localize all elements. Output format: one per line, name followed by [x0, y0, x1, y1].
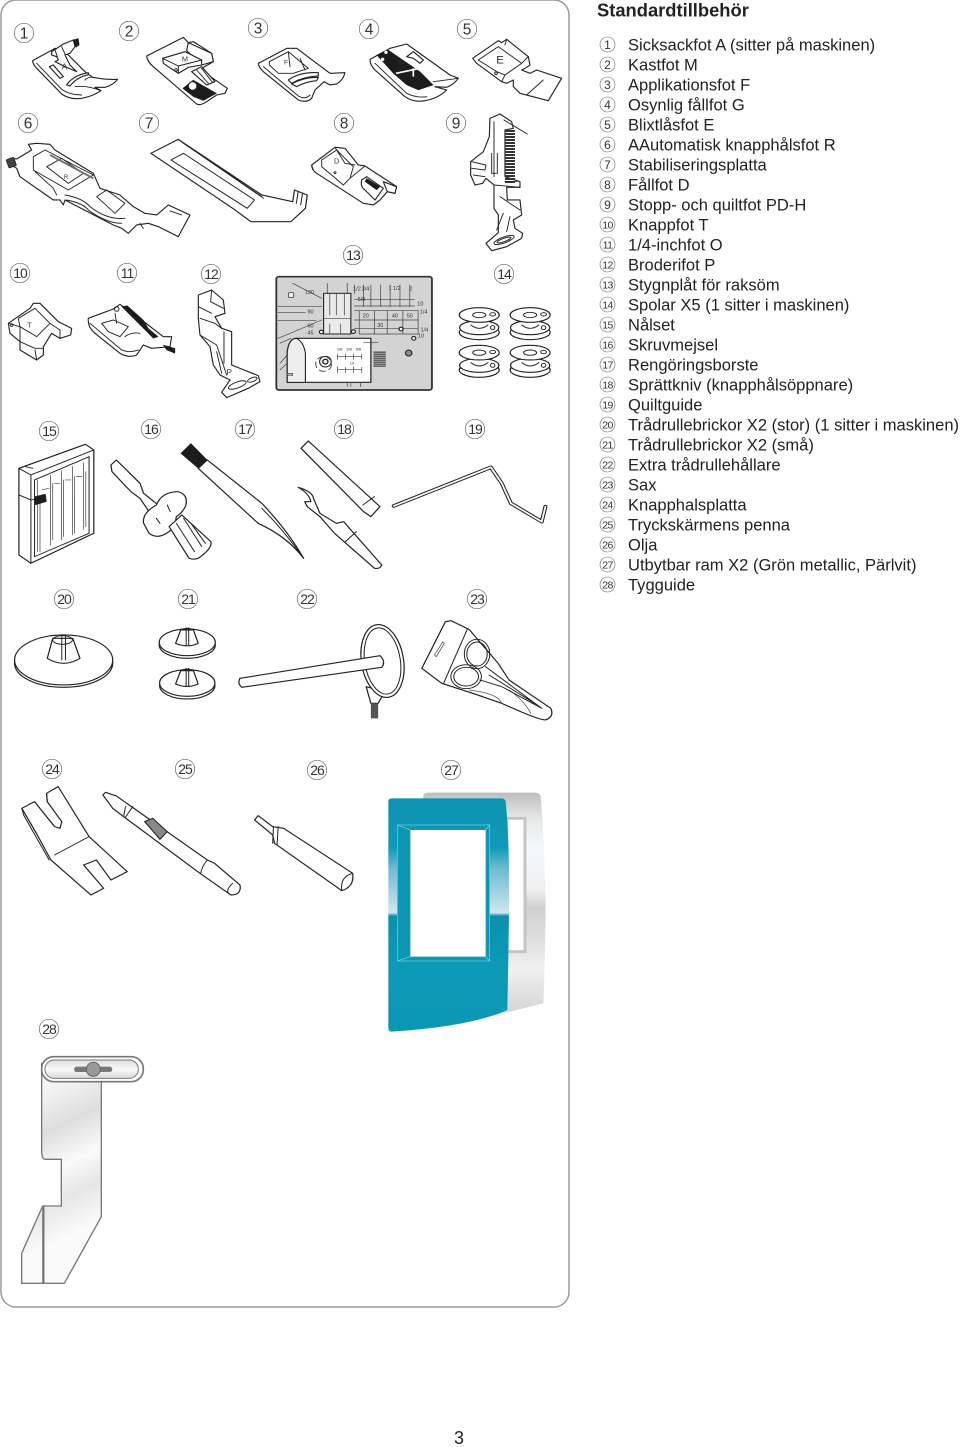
list item 17: 17 [602, 360, 613, 372]
icon: interchangeable frames [388, 793, 546, 1032]
icon: touch screen stylus [103, 792, 240, 895]
icon: straight stitch plate: 20 [363, 314, 369, 319]
label 3 [248, 18, 268, 38]
list item 3: Applikationsfot F [628, 76, 750, 94]
list item 13: 13 [602, 280, 613, 292]
list item 28: 28 [602, 580, 613, 592]
label 26 [307, 760, 327, 780]
list item 23: Sax [628, 476, 657, 494]
label 7: 7 [145, 116, 153, 132]
list: accessories [600, 36, 959, 594]
list item 23 [600, 476, 657, 494]
list item 12: 12 [602, 260, 613, 272]
list item 26: Olja [628, 536, 658, 554]
label 1: 1 [20, 26, 28, 42]
label 6: 6 [24, 116, 32, 132]
label 20: 20 [57, 591, 72, 607]
label 23 [467, 589, 487, 609]
icon: automatic buttonhole foot R [6, 143, 190, 237]
icon: button shank plate [22, 787, 127, 895]
icon: straight stitch plate: 10 [418, 334, 424, 339]
label 4 [359, 19, 379, 39]
list item 11: 11 [603, 240, 613, 252]
label 2 [119, 21, 139, 41]
list item 18: Sprättkniv (knapphålsöppnare) [628, 376, 853, 394]
label 14 [494, 264, 514, 284]
icon: applique foot F: F [284, 60, 288, 67]
list item 18: 18 [602, 380, 613, 392]
list item 14: Spolar X5 (1 sitter i maskinen) [628, 296, 849, 314]
icon: quarter inch foot O [88, 304, 175, 356]
label 17: 17 [238, 421, 253, 437]
label 9: 9 [452, 116, 460, 132]
icon: straight stitch plate: 2 [409, 287, 412, 293]
label 13 [343, 245, 363, 265]
icon: scissors [422, 621, 552, 720]
icon: blind hem foot G [370, 44, 458, 101]
icon: straight stitch plate: 10 [350, 361, 354, 365]
list item 19: 19 [602, 400, 613, 412]
icon: small spool cap 2 [160, 668, 215, 699]
icon: straight stitch plate: 120 [305, 290, 314, 296]
list item 21: 21 [602, 440, 613, 452]
list item 25: Tryckskärmens penna [628, 516, 791, 534]
icon: screwdriver [111, 460, 211, 559]
list item 15 [600, 316, 675, 334]
list item 3: 3 [604, 78, 611, 92]
list item 26: 26 [602, 540, 613, 552]
icon: straight stitch plate [276, 277, 432, 390]
list item 6: AAutomatisk knapphålsfot R [628, 136, 836, 154]
label 25: 25 [178, 761, 193, 777]
icon: straight stitch plate: 30 [377, 323, 383, 329]
list item 22: 22 [602, 460, 613, 472]
icon: button foot T [8, 303, 72, 360]
icon: straight stitch plate: 5/8 [356, 348, 361, 352]
label 7 [139, 113, 159, 133]
icon: bobbin 1 [459, 308, 499, 340]
icon: fabric guide [22, 1057, 143, 1283]
icon: straight stitch plate: 45 [307, 331, 314, 337]
list item 16: 16 [602, 340, 613, 352]
label 26: 26 [310, 762, 325, 778]
icon: straight stitch plate: 1/2 [353, 287, 361, 293]
label 3: 3 [254, 20, 262, 38]
label 19 [465, 419, 485, 439]
icon: large spool cap [15, 635, 113, 687]
list item 1: 1 [604, 38, 611, 52]
label 1 [14, 23, 34, 43]
icon: zigzag foot A: A [61, 61, 67, 71]
list item 10: Knappfot T [628, 216, 709, 234]
label 17 [235, 419, 255, 439]
label 23: 23 [470, 591, 485, 607]
list item 23: 23 [602, 480, 613, 492]
illustrations row 3 and 4 [19, 277, 550, 568]
label 21 [178, 589, 198, 609]
list item 1: Sicksackfot A (sitter på maskinen) [628, 36, 875, 54]
icon: straight stitch plate: 60 [307, 324, 314, 330]
list item 4: Osynlig fållfot G [628, 96, 745, 114]
label 27: 27 [444, 762, 459, 778]
label 28: 28 [42, 1021, 57, 1037]
icon: cleaning brush [181, 443, 304, 558]
label 4: 4 [365, 22, 374, 38]
list item 13: Stygnplåt för raksöm [628, 276, 780, 294]
label 18 [334, 419, 354, 439]
icon: zipper foot E [473, 39, 562, 101]
label 24: 24 [45, 761, 60, 777]
list item 4: 4 [604, 98, 611, 112]
icon: straight stitch plate: 1/4 [421, 328, 428, 334]
icon: overcast foot M: M [182, 55, 188, 64]
label 18: 18 [337, 421, 352, 437]
icon: quilting foot PD-H [471, 114, 527, 251]
list item 5: 5 [604, 118, 611, 132]
label 21: 21 [181, 591, 196, 607]
icon: quilting guide [394, 467, 545, 522]
list item 24: 24 [602, 500, 613, 512]
list item 8: 8 [604, 178, 611, 192]
list item 10: 10 [602, 220, 613, 232]
list item 2: 2 [604, 58, 611, 72]
list item 7: 7 [604, 158, 611, 172]
icon: straight stitch plate: 1/4 [420, 310, 427, 315]
label 25 [175, 759, 195, 779]
list item 9: Stopp- och quiltfot PD-H [628, 196, 806, 214]
icon: needle set [19, 444, 94, 563]
label 24 [42, 759, 62, 779]
icon: embroidery foot P: P [227, 368, 232, 377]
list item 20: Trådrullebrickor X2 (stor) (1 sitter i maskinen) [628, 416, 959, 434]
icon: extra spool holder [239, 622, 409, 718]
label 20 [54, 589, 74, 609]
icon: zipper foot E: E [496, 54, 504, 66]
list item 19: Quiltguide [628, 396, 702, 414]
icon: automatic buttonhole foot R: R [64, 175, 69, 181]
icon: straight stitch plate: 90 [307, 310, 314, 315]
icon: small spool cap 1 [159, 628, 215, 658]
list item 12: Broderifot P [628, 256, 715, 274]
list item 15: 15 [602, 320, 613, 332]
label 22: 22 [300, 591, 315, 607]
icon: straight stitch plate: 40 [392, 314, 398, 319]
icon: applique foot F [258, 48, 345, 101]
list item 24: Knapphalsplatta [628, 496, 747, 514]
heading: Standardtillbehör [597, 0, 749, 20]
list item 8: Fållfot D [628, 176, 690, 194]
icon: overcast foot M [147, 37, 227, 105]
list item 16: Skruvmejsel [628, 336, 718, 354]
icon: button foot T: T [27, 321, 32, 330]
list item 6: 6 [604, 138, 611, 152]
icon: zigzag foot A [33, 38, 118, 99]
label 9 [446, 113, 466, 133]
list item 21: Trådrullebrickor X2 (små) [628, 436, 814, 454]
label 11: 11 [121, 265, 134, 281]
label 13: 13 [346, 247, 361, 263]
icon: straight stitch plate: 50 [407, 314, 413, 319]
panel: accessories illustration [1, 0, 569, 1307]
list item 27: Utbytbar ram X2 (Grön metallic, Pärlvit) [628, 556, 916, 574]
icon: stabilizer plate [151, 139, 307, 222]
icon: hemmer foot D: D [334, 156, 339, 165]
list item 25: 25 [602, 520, 613, 532]
label 5 [457, 19, 477, 39]
label 10: 10 [13, 265, 28, 281]
icon: straight stitch plate: 5/8 [358, 297, 365, 303]
icon: oil bottle [255, 816, 353, 891]
list item 8 [600, 176, 690, 194]
icon: bobbin 4 [510, 345, 550, 377]
list item 22: Extra trådrullehållare [628, 456, 781, 474]
list item 11: 1/4-inchfot O [628, 236, 723, 254]
list item 28: Tygguide [628, 576, 695, 594]
label 12 [201, 264, 221, 284]
label 22 [297, 589, 317, 609]
icon: embroidery foot P [198, 290, 260, 398]
label 2: 2 [125, 24, 133, 40]
icon: straight stitch plate: 1 1/2 [388, 286, 401, 292]
label 28 [39, 1019, 59, 1039]
label 27 [441, 760, 461, 780]
icon: straight stitch plate: 10 [417, 302, 423, 308]
label 10 [10, 263, 30, 283]
list item 14: 14 [602, 300, 613, 312]
label 11 [117, 263, 137, 283]
list item 27: 27 [602, 560, 613, 572]
icon: straight stitch plate: 1/8 [337, 348, 342, 352]
list item 15: Nålset [628, 316, 675, 334]
illustrations row 5 and 6 [15, 621, 552, 895]
label 12: 12 [204, 266, 219, 282]
icon: bobbin 3 [459, 345, 499, 377]
icon: hemmer foot D [312, 147, 397, 205]
icon: blind hem foot G: G [399, 59, 404, 66]
label 8 [334, 113, 354, 133]
icon: seam ripper [298, 441, 382, 568]
list item 20: 20 [602, 420, 613, 432]
icon: bobbin 2 [510, 308, 550, 340]
label 5: 5 [463, 22, 471, 38]
label 14: 14 [497, 266, 512, 282]
list item 17: Rengöringsborste [628, 356, 758, 374]
label 19: 19 [468, 421, 483, 437]
label 16 [141, 419, 161, 439]
list item 7: Stabiliseringsplatta [628, 156, 768, 174]
list item 5: Blixtlåsfot E [628, 116, 714, 134]
label 6 [18, 113, 38, 133]
list item 2: Kastfot M [628, 56, 698, 74]
icon: straight stitch plate: 3/4 [362, 287, 369, 293]
label 16: 16 [144, 421, 159, 437]
icon: straight stitch plate: 3/8 [346, 348, 352, 352]
label 15 [39, 421, 59, 441]
list item 9: 9 [604, 198, 611, 212]
list item 26 [600, 536, 658, 554]
label 8: 8 [340, 116, 348, 132]
label 15: 15 [42, 423, 57, 439]
